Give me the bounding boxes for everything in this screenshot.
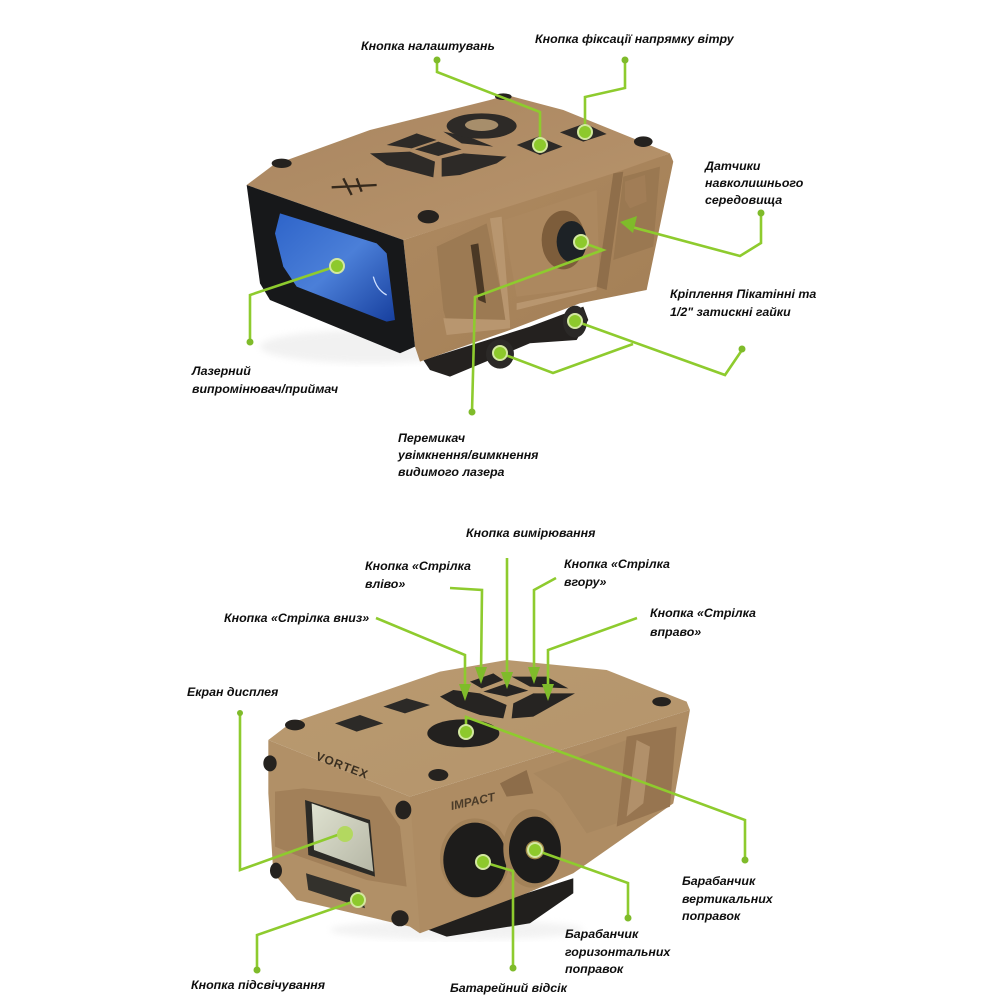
callout: elevation dial — [459, 717, 748, 864]
label: settings button: Кнопка налаштувань — [361, 39, 495, 53]
device photo: top view, rangefinder front — [247, 93, 673, 377]
arrow: left button — [450, 588, 487, 684]
label: elevation dial: вертикальних — [682, 892, 774, 906]
side recesses — [437, 223, 507, 333]
mount — [420, 878, 573, 937]
body side — [403, 153, 673, 362]
knobs — [440, 818, 510, 898]
body side — [410, 710, 690, 933]
picatinny mount — [423, 306, 588, 377]
screen — [305, 800, 375, 877]
label: left button: вліво» — [365, 577, 405, 591]
label: right button: Кнопка «Стрілка — [650, 606, 756, 620]
label: windage dial: горизонтальних — [565, 945, 671, 959]
arrow: environment sensors — [620, 210, 764, 256]
label: up button: Кнопка «Стрілка — [564, 557, 670, 571]
label: laser emitter: випромінювач/приймач — [192, 382, 338, 396]
callout: display screen — [237, 710, 353, 870]
label: left button: Кнопка «Стрілка — [365, 559, 471, 573]
front recess — [275, 788, 407, 887]
label: visible laser switch: увімкнення/вимкнення — [397, 448, 539, 462]
dial — [542, 211, 585, 269]
callout: picatinny mount and nuts — [493, 314, 746, 375]
label: battery compartment: Батарейний відсік — [450, 981, 568, 995]
IMPACT logo: IMPACT — [449, 790, 498, 813]
top buttons — [387, 133, 437, 148]
side panel — [533, 740, 627, 833]
lens — [275, 213, 395, 322]
arrow: measure button — [501, 558, 513, 689]
backlight button — [306, 873, 365, 908]
label: visible laser switch: видимого лазера — [398, 465, 505, 479]
label: picatinny mount: Кріплення Пікатінні та — [670, 287, 816, 301]
label: right button: вправо» — [650, 625, 701, 639]
label: elevation dial: Барабанчик — [682, 874, 756, 888]
label: laser emitter: Лазерний — [191, 364, 251, 378]
callout: wind lock button — [578, 56, 628, 139]
arrow: right button — [542, 618, 637, 701]
logo — [332, 178, 377, 195]
label: backlight button: Кнопка підсвічування — [191, 978, 326, 992]
arrow: up button — [528, 578, 556, 684]
arrow: down button — [376, 618, 471, 701]
label: picatinny mount: 1/2" затискні гайки — [670, 305, 791, 319]
callout: visible laser switch — [468, 235, 603, 416]
label: windage dial: Барабанчик — [565, 927, 639, 941]
label: display screen: Екран дисплея — [187, 685, 279, 699]
device photo: bottom view, rangefinder rear — [263, 660, 690, 940]
body front — [268, 740, 420, 933]
label: visible laser switch: Перемикач — [398, 431, 465, 445]
callout: settings button — [434, 56, 547, 152]
label: up button: вгору» — [564, 575, 606, 589]
label: windage dial: поправок — [565, 962, 624, 976]
label: elevation dial: поправок — [682, 909, 741, 923]
callout: laser emitter — [246, 259, 344, 346]
body top — [247, 95, 670, 240]
label: wind lock button: Кнопка фіксації напрямку вітру — [535, 32, 735, 46]
label: environment sensors: навколишнього — [705, 176, 804, 190]
callout: windage dial — [528, 843, 632, 922]
label: measure button: Кнопка вимірювання — [466, 526, 596, 540]
label: environment sensors: Датчики — [704, 159, 761, 173]
VORTEX logo: VORTEX — [314, 749, 371, 782]
body top — [268, 660, 690, 797]
label: environment sensors: середовища — [705, 193, 782, 207]
front frame — [247, 185, 415, 353]
label: down button: Кнопка «Стрілка вниз» — [224, 611, 369, 625]
callout: backlight button — [254, 893, 365, 974]
callout: battery compartment — [476, 855, 516, 972]
top buttons — [440, 690, 507, 718]
